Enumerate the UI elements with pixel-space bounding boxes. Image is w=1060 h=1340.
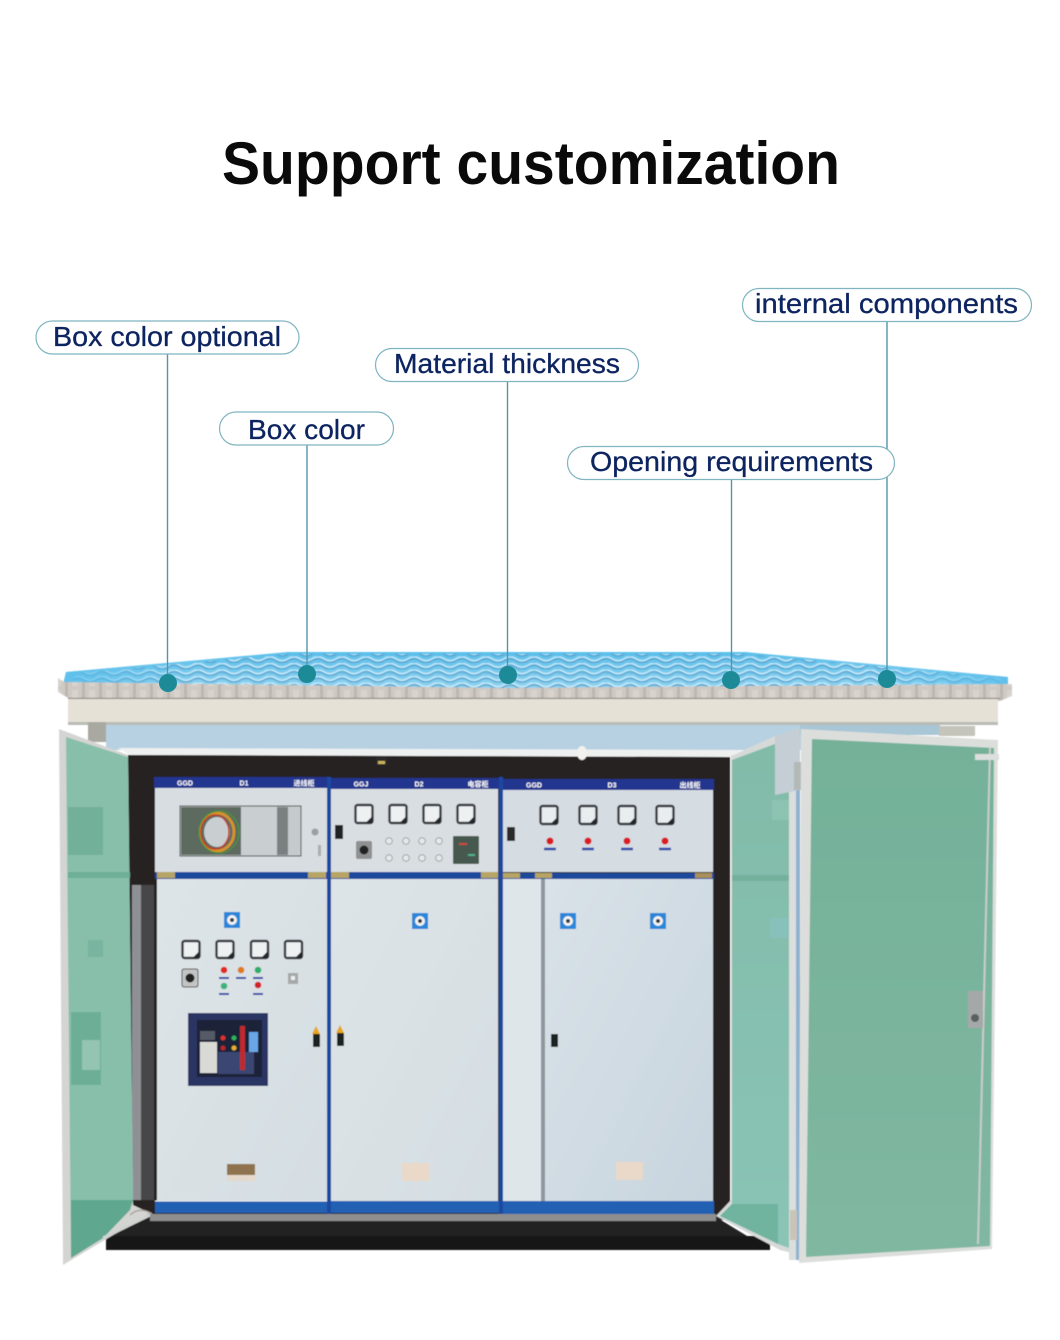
indicator square [412,913,428,929]
panel 3 [499,777,714,1214]
indicator square [224,912,240,928]
title: Support customization [222,130,840,197]
rotary switch [182,969,198,987]
indicator lights [219,967,263,994]
left door [59,729,152,1265]
door lock [336,1025,344,1046]
silver threshold [150,1214,716,1221]
meters [182,941,302,958]
wiring window [180,806,301,856]
callout: internal components [742,288,1032,688]
rotary switch [356,841,372,859]
roof [58,652,1012,701]
door locks [312,1026,320,1047]
panel 2: GGJ [354,782,368,788]
panel 3: GGD [526,782,542,790]
interior cavity [128,755,730,1220]
pilot lights [386,838,442,861]
callout: internal components: internal components [755,288,1018,319]
panel 2: D2 [415,782,424,788]
meters [356,805,474,823]
callout: Opening requirements [568,446,894,689]
callout: Box color [220,412,394,683]
callout: Box color optional: Box color optional [53,321,281,352]
panel 2 [327,777,499,1214]
meters [540,806,674,824]
controller [453,836,479,864]
white lintel [118,748,742,757]
panel 1: GGD [177,780,193,788]
panel 3: D3 [608,782,617,790]
circuit breaker [188,1013,268,1086]
indicator squares [560,913,576,929]
red lights [544,838,671,849]
callout: Material thickness [376,348,638,684]
panel 1: D1 [240,780,249,788]
right door [799,729,999,1263]
panel 2: 电容柜 [468,780,488,788]
product photo: kiosk substation [58,652,1012,1265]
roof fascia [68,699,998,725]
callout: Opening requirements: Opening requirements [590,446,873,477]
panel 3: 出线柜 [680,780,700,790]
blue soffit band [106,725,806,750]
panel 1: 进线柜 [294,778,314,788]
callout: Material thickness: Material thickness [394,348,620,379]
right inner door leaf [716,728,801,1260]
callout: Box color optional [36,321,299,692]
base plinth [106,1217,770,1250]
callout: Box color: Box color [248,414,365,445]
panel 1 [154,777,327,1213]
